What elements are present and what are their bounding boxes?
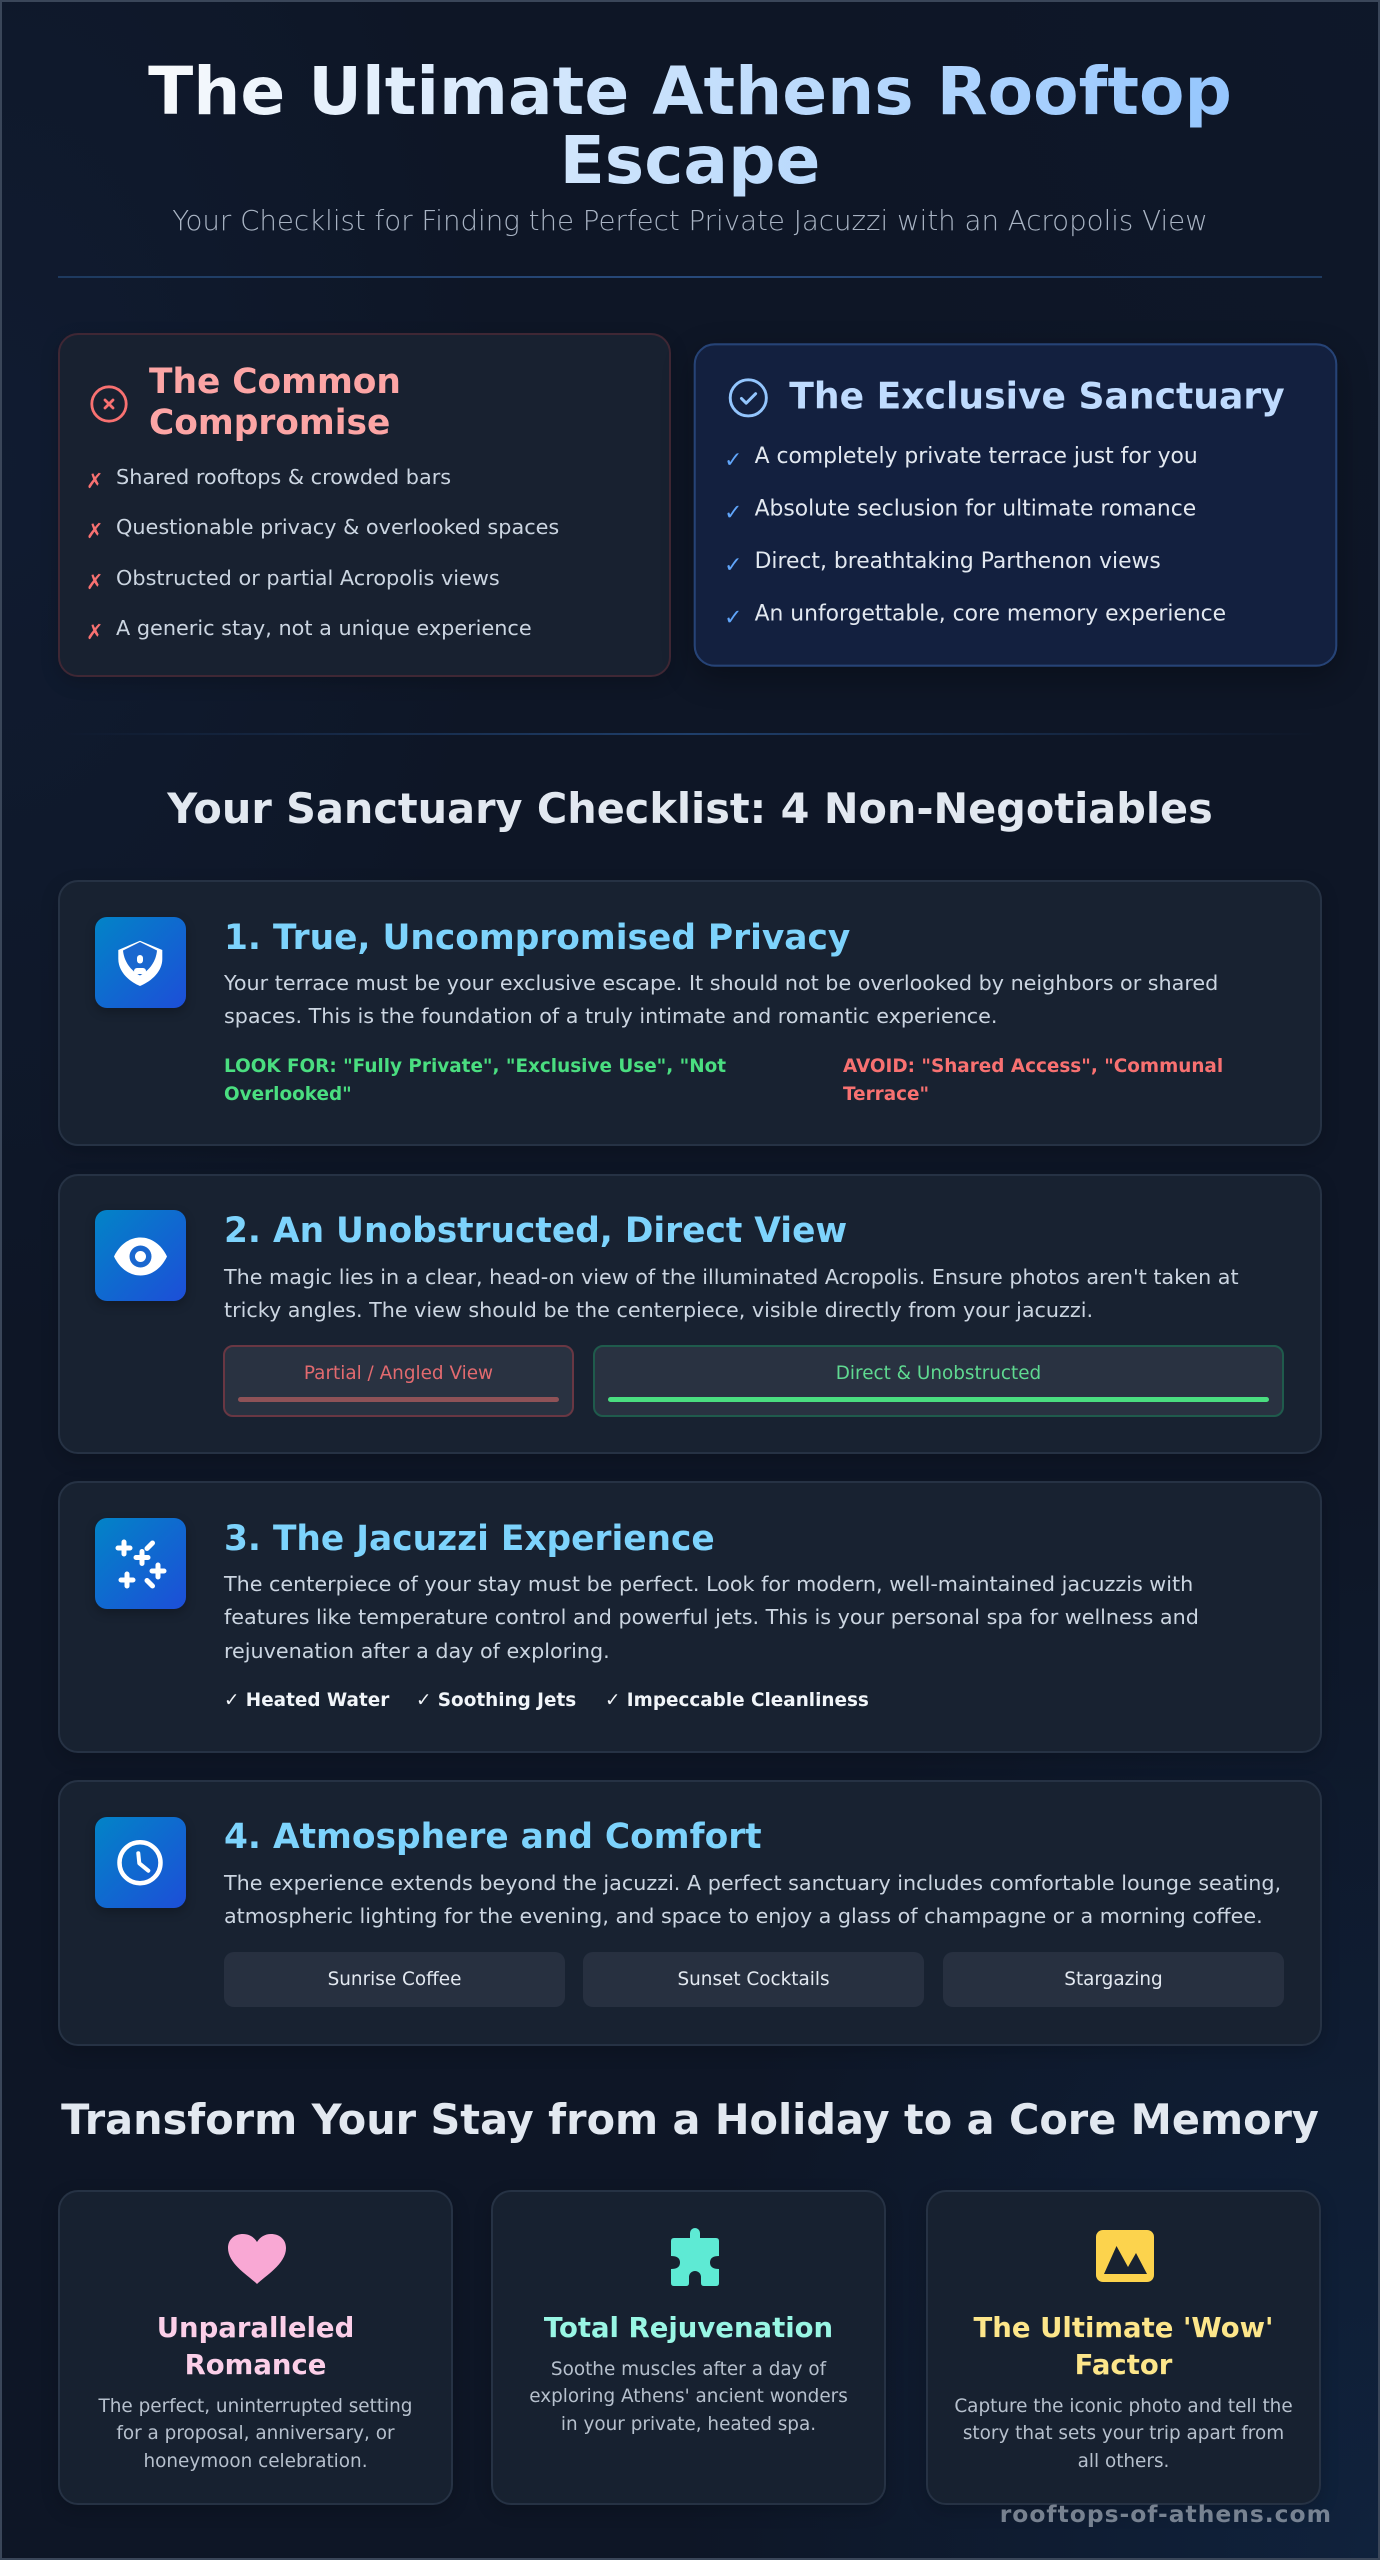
compromise list: ✗ [86,570,103,594]
compromise list: ✗ [86,469,103,493]
sanctuary list [724,443,1226,630]
sanctuary list: Absolute seclusion for ultimate romance [755,496,1196,521]
avoid label: Terrace" [843,1084,929,1104]
list item 1 [724,443,1198,472]
text: jacuzzi description: features like temperature control and powerful jets. This is your personal spa for wellness and [224,1605,1199,1629]
icon: heart [228,2234,286,2284]
panel: 3 jacuzzi [58,1481,1322,1753]
panel: 1 privacy [58,880,1322,1146]
list item 4 [724,601,1226,630]
title: wow factor: Factor [1075,2349,1172,2381]
list item 3 [724,548,1161,577]
compromise list: Questionable privacy & overlooked spaces [116,515,559,539]
text: jacuzzi description: rejuvenation after a day of exploring. [224,1638,610,1662]
list item 2 [724,496,1196,525]
heading: transform your stay: Transform Your Stay from a Holiday to a Core Memory [61,2096,1319,2144]
sanctuary list: A completely private terrace just for you [755,443,1198,468]
look for label: LOOK FOR: "Fully Private", "Exclusive Use", "Not [224,1056,726,1077]
icon: sparkles [95,1518,186,1609]
title: romance [157,2312,354,2381]
text: atmosphere description: atmospheric lighting for the evening, and space to enjoy a glass of champagne or a morning coffee. [224,1904,1263,1928]
panel: unparalleled romance [58,2190,453,2505]
panel: the exclusive sanctuary [694,343,1337,667]
sanctuary list: ✓ [724,500,742,525]
heading: privacy: 1. True, Uncompromised Privacy [224,918,850,958]
text: rejuvenation: in your private, heated spa. [561,2414,816,2435]
title: romance: Romance [185,2349,326,2381]
check: cleanliness: ✓ Impeccable Cleanliness [605,1690,869,1711]
partial label: Partial / Angled View [304,1363,493,1384]
text: rejuvenation: Soothe muscles after a day of [551,2358,826,2380]
text: romance: The perfect, uninterrupted setting [99,2396,412,2416]
chip: sunset cocktails: Sunset Cocktails [677,1969,830,1990]
title: wow factor: The Ultimate 'Wow' [974,2312,1273,2344]
avoid label: AVOID: "Shared Access", "Communal [843,1056,1223,1077]
panel: the ultimate wow factor [926,2190,1321,2505]
text: romance [98,2396,412,2472]
text: wow factor: story that sets your trip apart from [963,2423,1284,2444]
chip: stargazing: Stargazing [1064,1969,1163,1990]
icon: photo [1096,2230,1154,2282]
heading: view: 2. An Unobstructed, Direct View [224,1211,847,1251]
title: rejuvenation: Total Rejuvenation [544,2312,833,2344]
check: soothing jets: ✓ Soothing Jets [416,1690,576,1711]
subtitle: Your Checklist for Finding the Perfect Private Jacuzzi with an Acropolis View [172,204,1208,237]
heading: sanctuary checklist: Your Sanctuary Checklist: 4 Non-Negotiables [167,784,1213,832]
look for label [224,1056,726,1104]
text: privacy description: Your terrace must be your exclusive escape. It should not be overlooked by neighbors or shared [224,970,1218,994]
compromise list: Obstructed or partial Acropolis views [116,566,500,590]
text: atmosphere description [224,1870,1281,1928]
sanctuary list: ✓ [724,552,742,577]
list item 3 [86,566,500,594]
heading: the common compromise: Compromise [149,403,390,443]
title: The Ultimate Athens Rooftop [148,53,1232,130]
icon: check circle [728,378,768,418]
compromise list: ✗ [86,519,103,543]
text: view description: tricky angles. The view should be the centerpiece, visible directly from your jacuzzi. [224,1298,1093,1322]
check: heated water: ✓ Heated Water [224,1690,389,1711]
panel: total rejuvenation [491,2190,886,2505]
avoid label [843,1056,1223,1104]
heading: the exclusive sanctuary: The Exclusive Sanctuary [789,376,1285,418]
feature checks [224,1690,869,1711]
text: jacuzzi description [224,1572,1199,1662]
panel: 4 atmosphere [58,1780,1322,2046]
chip: sunrise coffee [224,1952,565,2007]
partial bar [238,1397,559,1402]
title: Escape [560,122,820,199]
heading: atmosphere: 4. Atmosphere and Comfort [224,1817,762,1857]
heading: jacuzzi: 3. The Jacuzzi Experience [224,1519,715,1559]
text: rejuvenation: exploring Athens' ancient wonders [529,2386,848,2407]
text: romance: for a proposal, anniversary, or [116,2423,395,2444]
text: wow factor: all others. [1078,2451,1169,2472]
text: wow factor [954,2396,1293,2472]
sanctuary list: ✓ [724,605,742,630]
panel: the common compromise [58,333,671,677]
icon: x circle [90,385,128,423]
chip: sunrise coffee: Sunrise Coffee [328,1969,461,1990]
text: jacuzzi description: The centerpiece of your stay must be perfect. Look for modern, well-maintained jacuzzis with [224,1572,1193,1596]
heading: the common compromise [149,362,401,443]
icon: puzzle [671,2228,719,2286]
direct bar [608,1397,1269,1402]
title [148,53,1232,199]
list item 4 [86,616,532,644]
footer watermark: rooftops-of-athens.com [1000,2500,1332,2528]
text: wow factor: Capture the iconic photo and tell the [954,2396,1293,2416]
view bar: direct [593,1345,1284,1417]
heading: the common compromise: The Common [149,362,401,402]
look for label: Overlooked" [224,1084,352,1104]
text: view description [224,1264,1239,1322]
icon: clock [95,1817,186,1908]
text: privacy description [224,970,1218,1028]
title: romance: Unparalleled [157,2312,354,2344]
chip: stargazing [943,1952,1284,2007]
text: romance: honeymoon celebration. [143,2451,368,2472]
list item 1 [86,465,451,493]
compromise list: A generic stay, not a unique experience [116,616,532,640]
direct label: Direct & Unobstructed [836,1363,1041,1384]
sanctuary list: Direct, breathtaking Parthenon views [755,548,1161,573]
icon: eye [95,1210,186,1301]
text: privacy description: spaces. This is the foundation of a truly intimate and romantic experience. [224,1004,998,1028]
compromise list: ✗ [86,620,103,644]
view bar: partial [223,1345,574,1417]
text: atmosphere description: The experience extends beyond the jacuzzi. A perfect sanctuary includes comfortable lounge seating, [224,1870,1281,1894]
compromise list: Shared rooftops & crowded bars [116,465,451,489]
title: wow factor [974,2312,1273,2381]
sanctuary list: An unforgettable, core memory experience [755,601,1226,626]
icon: shield [95,917,186,1008]
compromise list [86,465,559,644]
text: rejuvenation [529,2358,848,2435]
list item 2 [86,515,559,543]
panel: 2 view [58,1174,1322,1454]
chip: sunset cocktails [583,1952,924,2007]
text: view description: The magic lies in a clear, head-on view of the illuminated Acropolis. Ensure photos aren't taken at [224,1264,1239,1288]
sanctuary list: ✓ [724,447,742,472]
